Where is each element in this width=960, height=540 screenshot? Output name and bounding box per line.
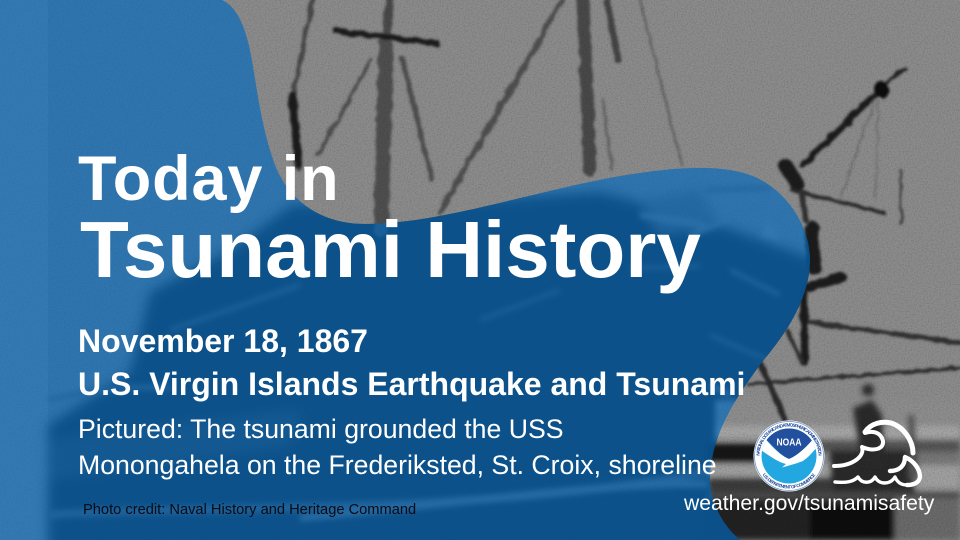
date: November 18, 1867 <box>78 323 368 359</box>
title: Tsunami History: Tsunami History <box>80 205 701 294</box>
icon: NOAA logo: NATIONAL OCEANIC AND ATMOSPHERIC ADMINISTRATION <box>756 423 822 456</box>
title: Today in: Today in <box>78 144 340 214</box>
icon: NOAA logo: U.S. DEPARTMENT OF COMMERCE <box>763 473 816 488</box>
event name: U.S. Virgin Islands Earthquake and Tsunami <box>78 366 745 402</box>
website url: weather.gov/tsunamisafety <box>684 492 934 515</box>
icon: NOAA logo: NOAA <box>776 436 802 448</box>
photo description: Monongahela on the Frederiksted, St. Croix, shoreline <box>78 450 717 480</box>
photo credit: Photo credit: Naval History and Heritage Command <box>83 502 416 518</box>
photo description: Pictured: The tsunami grounded the USS <box>78 414 564 444</box>
icon: NOAA logo <box>754 420 824 492</box>
photo description <box>78 414 717 480</box>
